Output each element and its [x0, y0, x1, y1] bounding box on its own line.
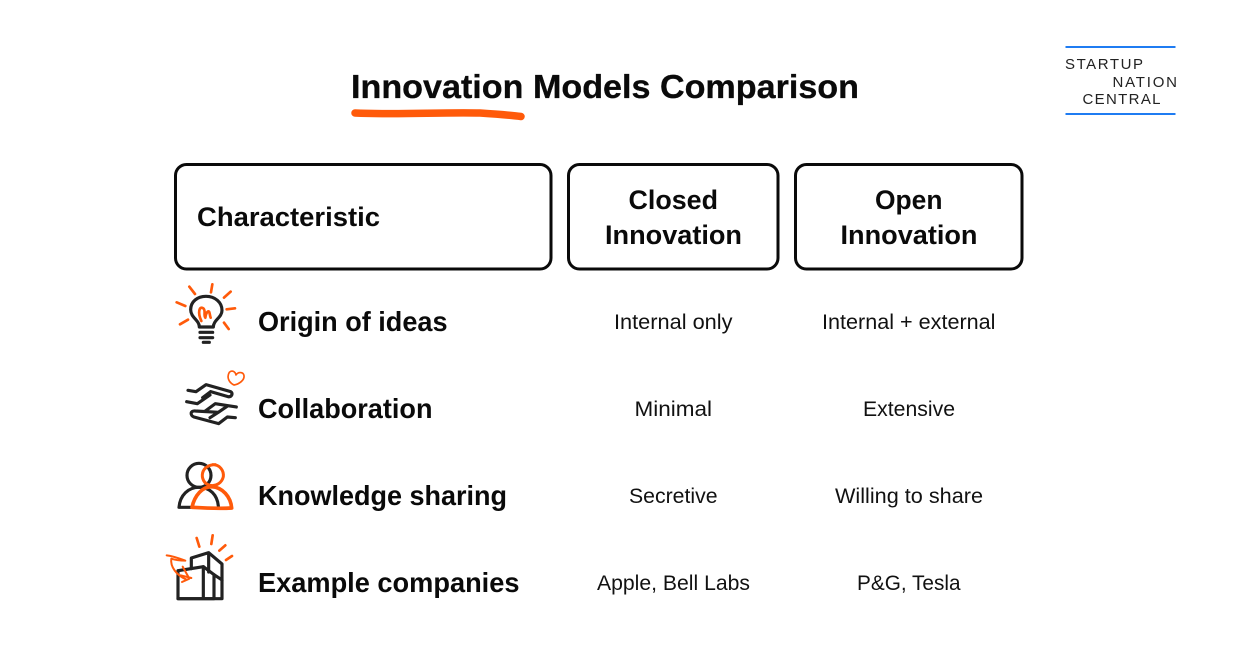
cell: Extensive: Extensive	[863, 397, 955, 421]
cell: Internal only: Internal only	[614, 310, 733, 334]
icon: light bulb	[177, 284, 235, 342]
table header: Closed Innovation	[568, 164, 778, 269]
table header: Open Innovation: Open	[875, 185, 942, 215]
logo: Startup Nation Central: CENTRAL	[1082, 91, 1160, 108]
logo: Startup Nation Central: STARTUP	[1065, 56, 1143, 73]
table header: Open Innovation	[796, 164, 1022, 269]
cell: Minimal: Minimal	[634, 397, 712, 421]
cell: Apple, Bell Labs: Apple, Bell Labs	[597, 571, 750, 595]
row label: Collaboration: Collaboration	[258, 393, 432, 424]
icon: hands and heart	[187, 371, 244, 424]
table header: Open Innovation: Innovation	[840, 220, 978, 250]
cell: Secretive: Secretive	[629, 484, 718, 508]
cell: Internal + external: Internal + external	[822, 310, 996, 334]
logo: Startup Nation Central	[1065, 46, 1177, 115]
row label: Example companies: Example companies	[258, 567, 520, 598]
table header: Characteristic: Characteristic	[197, 202, 380, 232]
table header: Characteristic	[176, 164, 551, 269]
title: Innovation Models Comparison	[351, 69, 859, 106]
icon: buildings with rocket	[167, 535, 232, 599]
row label: Knowledge sharing: Knowledge sharing	[258, 480, 507, 511]
logo: Startup Nation Central: NATION	[1112, 74, 1177, 91]
title underline	[355, 113, 521, 116]
table header: Closed Innovation: Innovation	[605, 220, 742, 250]
table header: Closed Innovation: Closed	[628, 185, 718, 215]
row label: Origin of ideas: Origin of ideas	[258, 306, 448, 337]
icon: two people	[179, 463, 232, 508]
cell: P&G, Tesla: P&G, Tesla	[857, 571, 961, 595]
cell: Willing to share: Willing to share	[835, 484, 983, 508]
